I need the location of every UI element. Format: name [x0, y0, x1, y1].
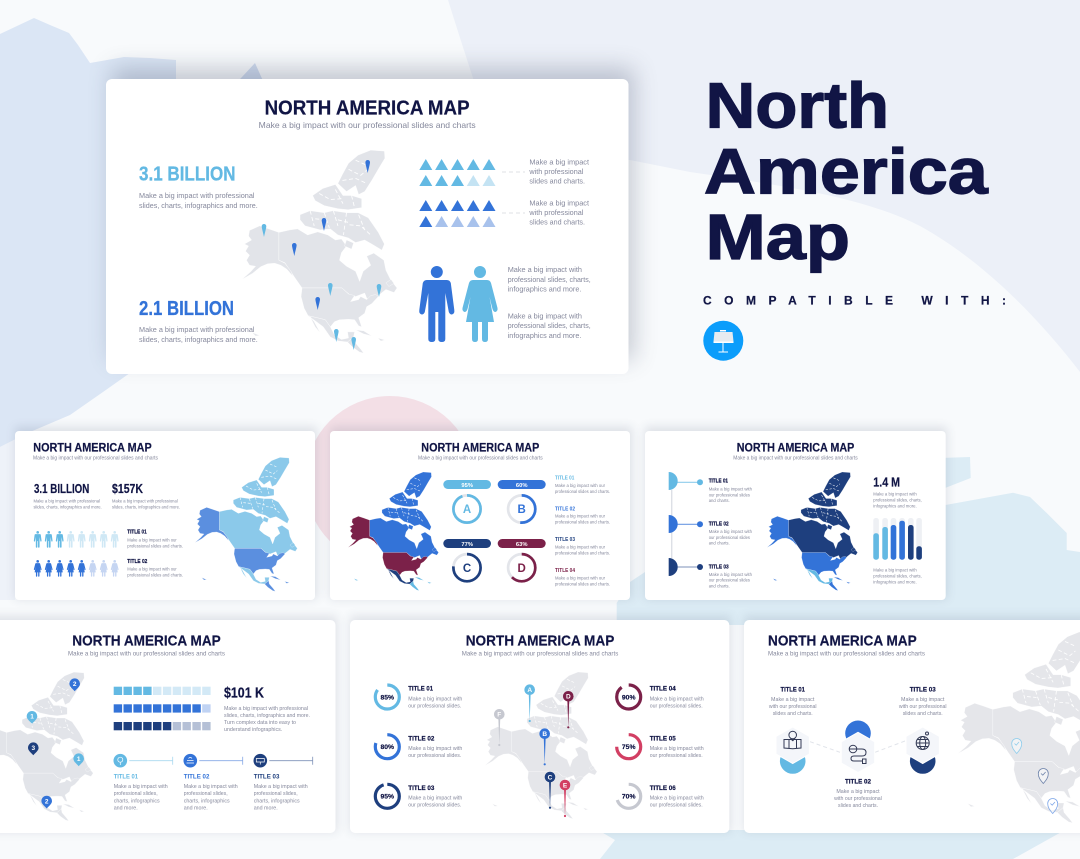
heading: NORTH AMERICA MAP [72, 634, 221, 650]
donut: 90% title 04: Make a big impact with [650, 696, 704, 702]
stat: $101 K: Turn complex data into easy to [224, 720, 296, 726]
text: title 01 [709, 479, 752, 503]
stat: 1.4 M: professional slides, charts, [873, 498, 922, 503]
map: grey with lettered pins: E [563, 782, 568, 789]
background: pale blue lower right shape [617, 493, 1080, 625]
stat: $157K: $157K [112, 481, 143, 496]
text: triangle note one [528, 157, 590, 186]
stat: $157K [112, 481, 180, 509]
map: grey with numbered pins: 2 [73, 681, 77, 688]
step: title 02: with our professional [833, 796, 882, 802]
donut: 85% title 01: 85% [380, 694, 394, 701]
heading: NORTH AMERICA MAP [768, 634, 917, 650]
stat A: 95% [461, 483, 473, 489]
text: title 04 [555, 568, 610, 586]
donut: 75% title 05: Make a big impact with [650, 746, 704, 752]
step: title 01: TITLE 01 [114, 773, 138, 780]
text: triangle note two [528, 198, 590, 227]
stat: $157K: Make a big impact with professional [112, 499, 178, 504]
text: chart note [873, 568, 922, 584]
text: title 01: Make a big impact with our [127, 538, 177, 543]
text: people note two: professional slides, charts, [508, 321, 591, 330]
subtitle: Make a big impact with our professional slides and charts [418, 455, 543, 461]
icon: woman [462, 266, 498, 342]
text: title 01: and charts. [709, 498, 730, 503]
subtitle: Make a big impact with our professional slides and charts [259, 120, 476, 130]
stat: $101 K: $101 K [224, 685, 264, 702]
text: title 03 [709, 564, 752, 588]
stat: 3.1 billion: Make a big impact with professional [34, 499, 100, 504]
subtitle: Make a big impact with our professional slides and charts [33, 455, 158, 461]
step: title 03 [253, 754, 313, 811]
stat B: B [518, 504, 526, 516]
map: grey with outline pins [958, 632, 1080, 823]
text: triangle note one: Make a big impact [529, 157, 590, 166]
text: triangle note two: slides and charts. [529, 218, 585, 227]
panel: slide six hexagon process [744, 616, 1080, 833]
text: people note one [508, 265, 591, 294]
step: title 01: slides and charts. [773, 711, 813, 717]
step: title 03: charts, infographics [254, 798, 300, 804]
text: title 03: TITLE 03 [709, 564, 729, 570]
text: title 01: Make a big impact with [709, 486, 752, 491]
stat: 3.1 billion: 3.1 BILLION [139, 163, 236, 186]
donut: 90% title 04: our professional slides. [650, 703, 703, 709]
heading: product title: Map [706, 201, 850, 273]
heading: product title: North [706, 70, 889, 142]
donut: 75% title 05: 75% [622, 744, 636, 751]
stat: 2.1 billion: 2.1 BILLION [139, 297, 234, 320]
text: people note one: professional slides, charts, [508, 275, 591, 284]
stat: 3.1 billion: 3.1 BILLION [34, 481, 89, 496]
panel: main slide [106, 68, 634, 374]
text: title 02: Make a big impact with our [127, 566, 177, 571]
stat C [443, 539, 491, 581]
donut: 95% title 03: our professional slides. [408, 803, 462, 809]
text: title 01 [127, 530, 183, 548]
subtitle: Make a big impact with our professional slides and charts [768, 650, 925, 657]
text: people note one: infographics and more. [508, 285, 581, 294]
map: grey with lettered pins: F [497, 712, 501, 719]
icon: globe [916, 732, 929, 750]
background: pink circle [305, 396, 475, 566]
stat: $101 K [224, 685, 310, 733]
map: maroon and blue regions [348, 472, 439, 591]
text: title 03: TITLE 03 [555, 537, 575, 543]
stat: $101 K: understand infographics. [224, 727, 283, 733]
map: grey with lettered pins: C [548, 774, 553, 781]
background: pale blue island shape [940, 457, 971, 490]
step: title 03: TITLE 03 [910, 687, 936, 694]
text: title 02 [555, 506, 610, 525]
donut: 90% title 04: 90% [622, 694, 636, 701]
donut: 90% title 04 [617, 685, 704, 709]
icon: map pin [784, 731, 801, 749]
timeline: connectors and semicircles [669, 472, 703, 576]
step: title 02: Make a big impact [836, 789, 880, 795]
icon: man [419, 266, 454, 342]
stat: 3.1 billion: slides, charts, infographics and more. [34, 504, 102, 509]
donut: 80% title 02: our professional slides. [408, 753, 462, 759]
step: title 03: Make a big impact with [254, 784, 308, 790]
donut: 70% title 06 [617, 784, 704, 809]
stat: 1.4 M [873, 474, 922, 508]
step: title 02: and more. [184, 805, 208, 811]
stat: 3.1 billion: Make a big impact with professional [139, 191, 255, 200]
text: title 02: TITLE 02 [555, 506, 575, 512]
panel: slide one population [15, 427, 317, 600]
text: compatible with: COMPATIBLE WITH: [703, 293, 1006, 307]
donut: 70% title 06: 70% [622, 794, 636, 801]
donut: 95% title 03: 95% [380, 794, 394, 801]
background: small map fragment [228, 63, 268, 92]
donut: 75% title 05: TITLE 05 [650, 735, 676, 742]
text: title 02: and charts. [709, 541, 730, 546]
text: title 01: TITLE 01 [555, 476, 574, 482]
donut: 80% title 02: TITLE 02 [408, 735, 435, 742]
stat D [498, 539, 546, 581]
step: title 03: slides and charts. [903, 711, 943, 717]
text: title 03: professional slides and charts. [555, 550, 610, 555]
text: title 02: TITLE 02 [127, 559, 147, 565]
heading: NORTH AMERICA MAP [466, 634, 614, 650]
bar chart [873, 518, 922, 560]
donut: 70% title 06: TITLE 06 [650, 785, 676, 792]
donut: 70% title 06: Make a big impact with [650, 796, 704, 802]
stat: 2.1 billion [139, 297, 258, 344]
stat: 1.4 M: 1.4 M [873, 474, 900, 489]
step: title 03: TITLE 03 [254, 773, 280, 780]
donut: 95% title 03: Make a big impact with [408, 796, 462, 802]
text: title 03: and charts. [709, 583, 730, 588]
map: grey with numbered pins: 1 [77, 756, 81, 763]
text: title 02 [709, 521, 752, 546]
step: title 02 [833, 720, 882, 809]
background: pale blue bottom band [598, 830, 1065, 859]
text: triangle note two: with professional [528, 208, 584, 217]
subtitle: Make a big impact with our professional slides and charts [733, 455, 858, 461]
text: title 02 [127, 559, 183, 577]
stat A [443, 480, 491, 523]
step: title 02: Make a big impact with [184, 784, 238, 790]
map: grey with numbered pins [0, 672, 93, 821]
stat: $101 K: slides, charts, infographics and more. [224, 713, 310, 719]
step: title 02: professional slides, [184, 791, 228, 797]
donut: 80% title 02: Make a big impact with [408, 746, 462, 752]
step: title 01: and more. [114, 805, 138, 811]
pictogram: women row [34, 560, 119, 577]
background: lower left pale shape [0, 432, 30, 600]
step: title 02: TITLE 02 [845, 778, 871, 785]
step: title 01: charts, infographics [114, 798, 160, 804]
text: title 04: professional slides and charts. [555, 581, 610, 586]
step: title 01: Make a big impact [771, 697, 815, 703]
text: title 03: Make a big impact with our [555, 544, 605, 549]
text: chart note: infographics and more. [873, 579, 917, 584]
text: title 02: Make a big impact with our [555, 514, 605, 519]
text: title 01: Make a big impact with our [555, 483, 605, 488]
subtitle: Make a big impact with our professional slides and charts [68, 650, 225, 657]
donut: 85% title 01: TITLE 01 [408, 686, 433, 693]
text: title 03 [555, 537, 610, 555]
text: triangle note one: with professional [528, 167, 584, 176]
step: title 03: and more. [254, 805, 278, 811]
text: title 01 [555, 476, 610, 494]
stat B [498, 480, 546, 523]
stat: 1.4 M: Make a big impact with [873, 492, 917, 497]
icon: route [849, 745, 866, 764]
stat: 3.1 billion [139, 163, 258, 210]
background: top right pale panel [448, 0, 1080, 372]
step: title 02 [184, 754, 243, 811]
stat: 1.4 M: infographics and more. [873, 503, 917, 508]
text: title 04: TITLE 04 [555, 568, 576, 574]
subtitle: Make a big impact with our professional slides and charts [462, 650, 618, 657]
step: title 01: with our professional [768, 704, 817, 710]
step: title 02: charts, infographics [184, 798, 230, 804]
heading: product title: America [704, 135, 988, 207]
icon: keynote [703, 321, 743, 361]
heading: NORTH AMERICA MAP [737, 441, 854, 455]
stat D: D [518, 563, 526, 575]
text: people note two [508, 312, 591, 340]
text: title 01: professional slides and charts. [127, 543, 183, 548]
text: people note one: Make a big impact with [508, 265, 582, 274]
stat: 3.1 billion [34, 481, 102, 509]
text: chart note: professional slides, charts, [873, 574, 922, 579]
step: title 03: professional slides, [254, 791, 298, 797]
text: triangle note two: Make a big impact [529, 198, 590, 207]
map: grey with numbered pins: 2 [45, 798, 49, 805]
step: title 03: Make a big impact [901, 697, 945, 703]
step: title 03: with our professional [898, 704, 947, 710]
donut: 85% title 01: Make a big impact with [408, 696, 462, 702]
donut: 70% title 06: our professional slides. [650, 803, 703, 809]
pictogram: blue triangles [419, 200, 496, 227]
map: grey with lettered pins [485, 672, 597, 819]
stat C: 77% [461, 542, 473, 548]
stat: 2.1 billion: Make a big impact with professional [139, 325, 255, 334]
panel: slide four square bars [0, 616, 337, 833]
text: title 02: professional slides and charts. [127, 572, 183, 577]
donut: 75% title 05: our professional slides. [650, 753, 703, 759]
text: triangle note one: slides and charts. [529, 177, 585, 186]
text: chart note: Make a big impact with [873, 568, 917, 573]
map: grey with lettered pins: D [566, 694, 571, 701]
chart: light squares row [114, 687, 211, 695]
background: left map silhouette [0, 18, 176, 447]
stat C: C [463, 563, 471, 575]
map: grey with lettered pins: A [527, 687, 532, 694]
pictogram: light triangles [419, 159, 496, 186]
stat: 3.1 billion: slides, charts, infographics and more. [139, 201, 258, 210]
donut: 95% title 03: TITLE 03 [408, 785, 435, 792]
stat: 2.1 billion: slides, charts, infographics and more. [139, 335, 258, 344]
text: title 02: our professional slides [709, 535, 751, 540]
step: title 01: TITLE 01 [781, 687, 805, 694]
stat: $157K: slides, charts, infographics and more. [112, 504, 180, 509]
donut: 75% title 05 [617, 735, 704, 759]
text: title 02: professional slides and charts. [555, 520, 610, 525]
donut: 85% title 01 [375, 685, 462, 709]
stat: $101 K: Make a big impact with professional [224, 706, 308, 712]
text: title 01: TITLE 01 [709, 479, 728, 485]
step: title 03 [898, 687, 947, 774]
heading: main slide title: NORTH AMERICA MAP [265, 97, 470, 119]
map: grey with numbered pins: 1 [30, 714, 34, 721]
map: navy regions [767, 472, 858, 591]
pictogram: men row [34, 531, 119, 548]
donut: 85% title 01: our professional slides. [408, 703, 462, 709]
step: title 01: Make a big impact with [114, 784, 168, 790]
map: grey with lettered pins: B [542, 731, 547, 738]
chart: blue squares row [114, 704, 211, 713]
text: title 01: TITLE 01 [127, 530, 147, 536]
text: people note two: Make a big impact with [508, 312, 582, 320]
map: blue regions [195, 457, 297, 591]
heading: NORTH AMERICA MAP [421, 441, 539, 455]
chart: navy squares row [114, 722, 211, 730]
step: title 01 [114, 754, 173, 811]
panel: slide three timeline and bars [645, 427, 947, 600]
heading: product title [704, 70, 988, 273]
step: title 02: slides and charts. [838, 803, 878, 809]
text: title 04: Make a big impact with our [555, 575, 605, 580]
donut: 90% title 04: TITLE 04 [650, 686, 676, 693]
step: title 02: TITLE 02 [184, 773, 210, 780]
stat D: 63% [516, 542, 528, 548]
text: title 02: Make a big impact with [709, 529, 752, 534]
map: grey North America with pins [242, 150, 397, 353]
panel: slide two percent rings [330, 427, 632, 600]
stat A: A [463, 504, 471, 516]
text: title 01: our professional slides [709, 492, 751, 497]
step: title 01 [768, 687, 817, 774]
donut: 80% title 02 [375, 735, 462, 759]
text: title 03: Make a big impact with [709, 572, 752, 577]
panel: slide five donuts and pins [350, 616, 731, 833]
text: title 03: our professional slides [709, 578, 751, 583]
map: grey with numbered pins: 3 [31, 745, 35, 752]
text: people note two: infographics and more. [508, 331, 581, 340]
heading: NORTH AMERICA MAP [33, 441, 152, 455]
donut: 95% title 03 [375, 784, 462, 809]
text: title 02: TITLE 02 [709, 521, 729, 527]
text: title 01: professional slides and charts. [555, 489, 610, 494]
step: title 01: professional slides, [114, 791, 158, 797]
stat B: 60% [516, 483, 528, 489]
donut: 80% title 02: 80% [380, 744, 394, 751]
